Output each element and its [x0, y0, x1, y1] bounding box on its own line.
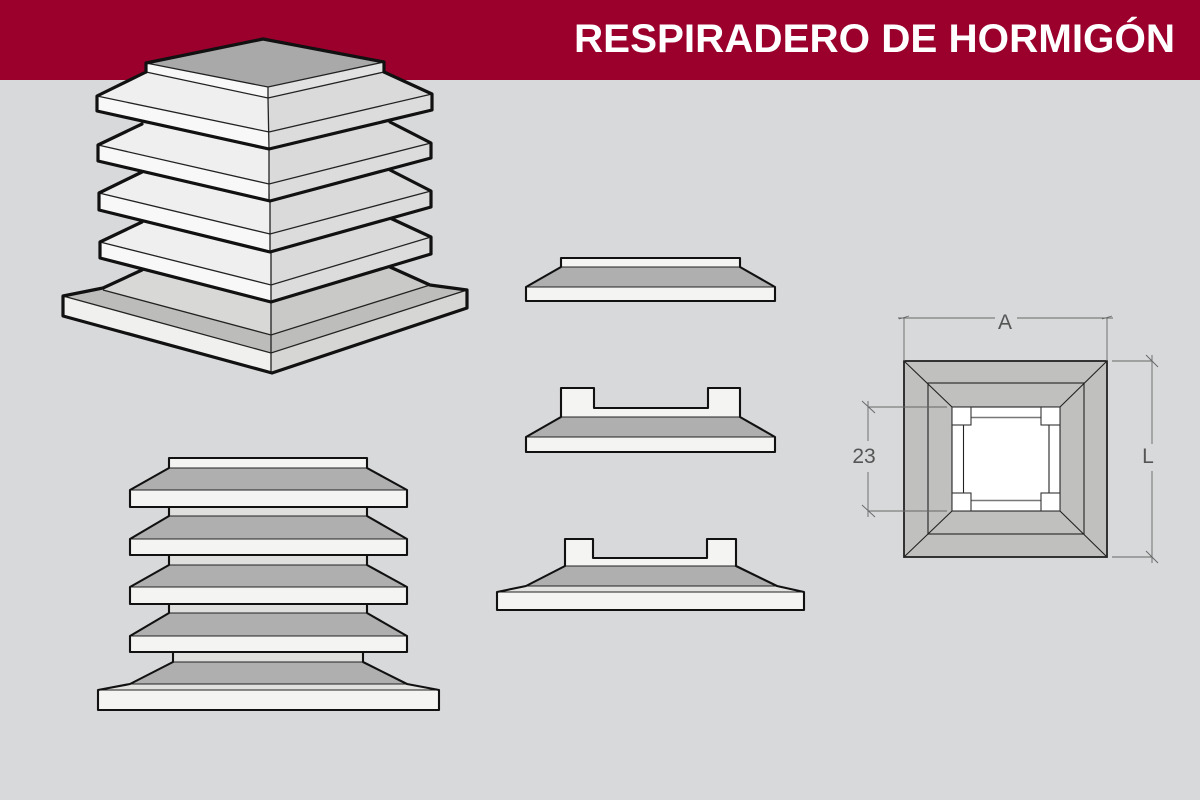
dimension L	[1112, 355, 1158, 563]
base slab	[63, 267, 467, 373]
lower base	[97, 652, 439, 710]
isometric view of the vent	[63, 39, 467, 373]
piece: top cap profile	[526, 258, 775, 301]
plan: sloped frame	[904, 361, 1107, 557]
top slab	[130, 458, 407, 507]
louvre slab 4	[100, 218, 431, 302]
dimension 23	[852, 401, 947, 517]
front elevation of the vent	[97, 458, 439, 710]
top louvre slab	[97, 72, 432, 149]
piece: notched intermediate louvre	[526, 388, 775, 452]
dimension L: L	[1142, 445, 1154, 468]
title: RESPIRADERO DE HORMIGÓN	[574, 15, 1175, 61]
plan: inner opening and corner blocks	[952, 407, 1060, 511]
top cap	[146, 39, 384, 98]
header banner	[0, 0, 1200, 80]
louvre slab 3	[99, 170, 431, 252]
louvre slab 2	[98, 122, 431, 201]
slab 4	[130, 604, 407, 652]
dimension A	[898, 311, 1113, 361]
piece: notched base	[497, 539, 804, 610]
dimension A: A	[998, 311, 1012, 334]
slab 3	[130, 555, 407, 604]
plan view with dimensions	[852, 311, 1158, 563]
dimension 23: 23	[852, 445, 876, 468]
slab 2	[130, 507, 407, 555]
